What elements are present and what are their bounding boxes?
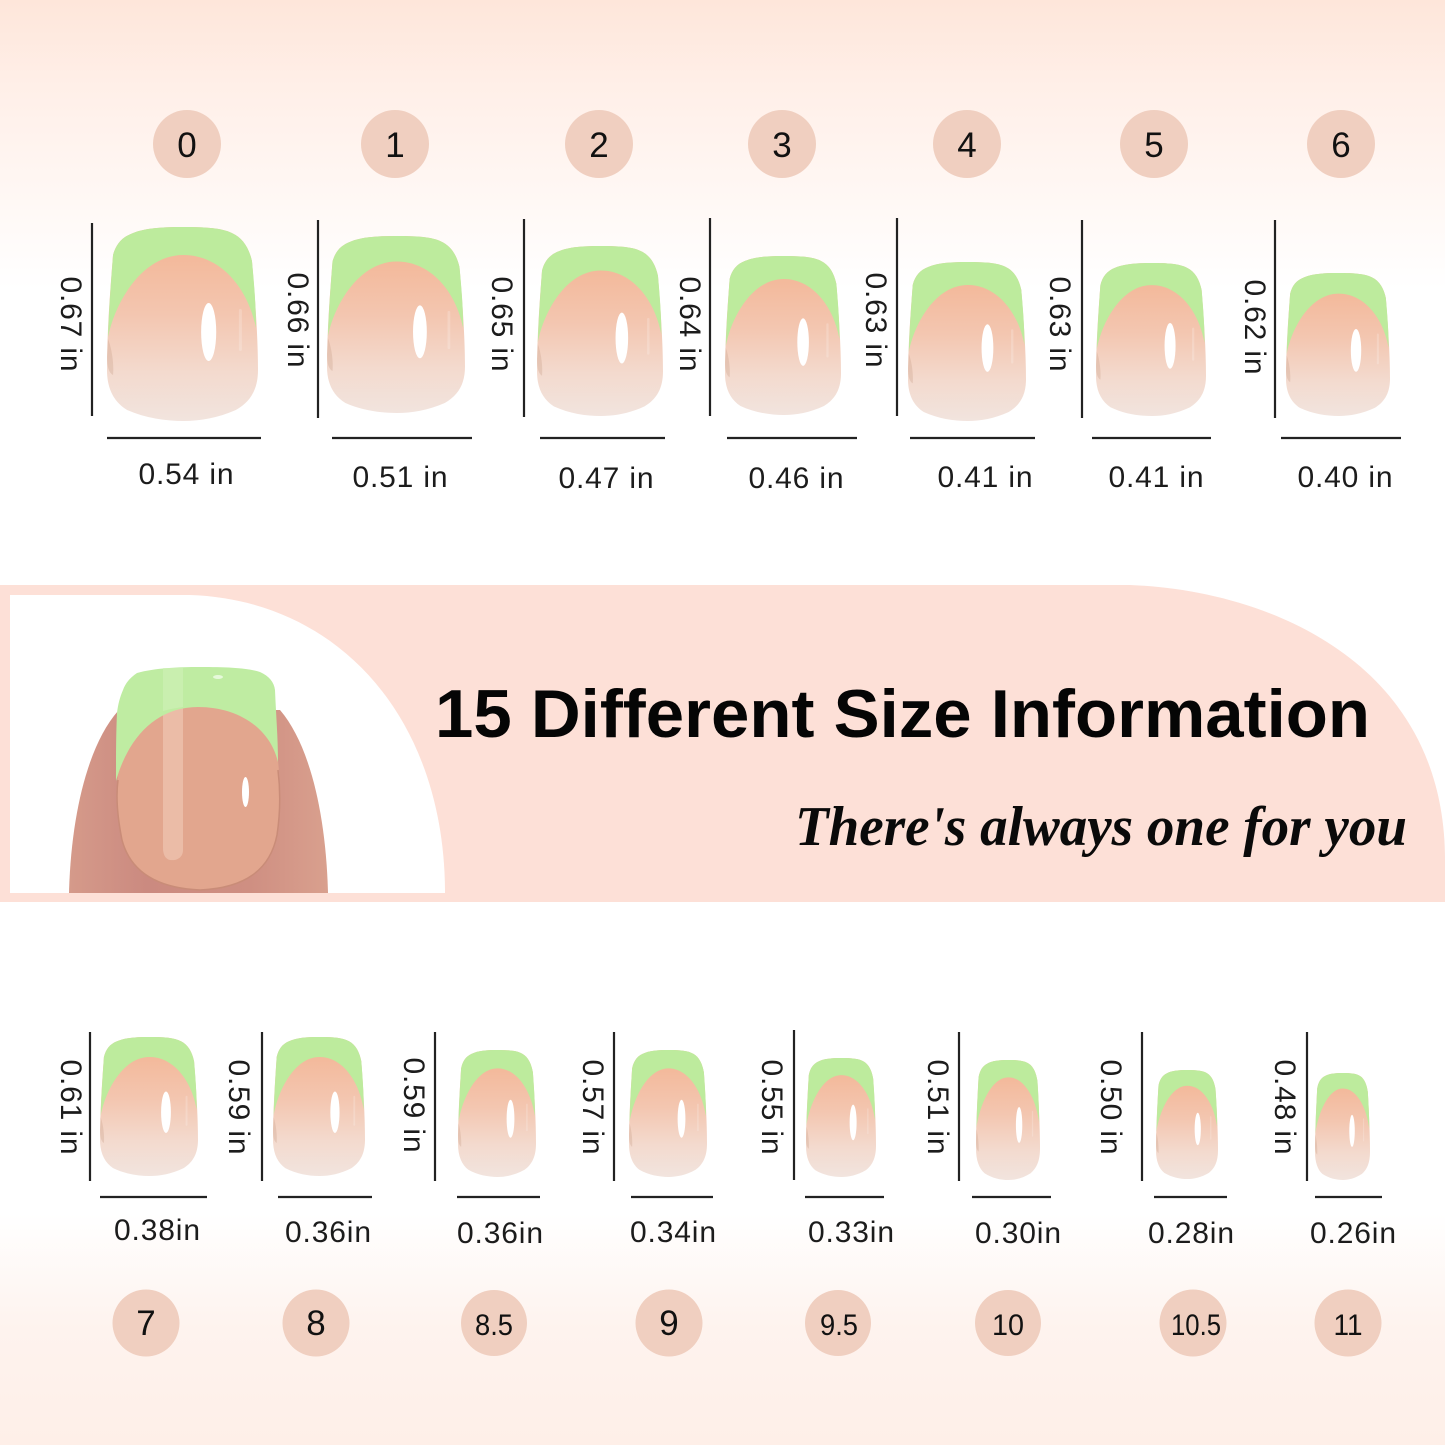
panel: banner xyxy=(0,585,1445,902)
number 9: 9 xyxy=(659,1304,679,1343)
width line xyxy=(1154,1196,1227,1198)
nail 8.5 xyxy=(458,1050,536,1177)
height line xyxy=(89,1032,91,1181)
height line xyxy=(709,218,711,416)
width label: 0.54 in xyxy=(138,458,234,491)
subtitle: There's always one for you xyxy=(795,796,1407,858)
nail 6 xyxy=(1286,273,1390,416)
number 6: 6 xyxy=(1331,126,1351,165)
nail 3 xyxy=(725,256,841,415)
height line xyxy=(1274,220,1276,418)
width line xyxy=(457,1196,540,1198)
size 5 xyxy=(1043,110,1211,494)
height label: 0.62 in xyxy=(1238,280,1271,374)
badge 10 xyxy=(975,1290,1041,1356)
number 4: 4 xyxy=(957,126,977,165)
width line xyxy=(805,1196,884,1198)
height label: 0.63 in xyxy=(1043,276,1076,372)
banner shape xyxy=(0,585,1445,902)
size 7 xyxy=(54,1032,207,1356)
number 10.5: 10.5 xyxy=(1171,1309,1221,1342)
number 1: 1 xyxy=(385,126,405,165)
height label: 0.66 in xyxy=(281,272,314,368)
number 2: 2 xyxy=(589,126,609,165)
badge 7 xyxy=(112,1290,180,1356)
height label: 0.59 in xyxy=(397,1058,430,1152)
width label: 0.46 in xyxy=(748,462,844,495)
badge 3 xyxy=(748,110,816,178)
number 9.5: 9.5 xyxy=(820,1309,858,1342)
nail 9 xyxy=(629,1050,707,1177)
width label: 0.28in xyxy=(1148,1217,1234,1250)
width line xyxy=(278,1196,372,1198)
badge 11 xyxy=(1314,1290,1382,1356)
size 1 xyxy=(281,110,472,494)
height line xyxy=(1141,1032,1143,1181)
number 10: 10 xyxy=(992,1309,1024,1342)
badge 8 xyxy=(282,1290,350,1356)
height label: 0.51 in xyxy=(921,1060,954,1154)
badge 9.5 xyxy=(805,1290,871,1356)
width line xyxy=(107,437,261,439)
width label: 0.36in xyxy=(285,1216,371,1249)
height label: 0.65 in xyxy=(485,276,518,372)
size 9 xyxy=(576,1032,716,1356)
nail 11 xyxy=(1315,1073,1370,1180)
height line xyxy=(1306,1032,1308,1181)
width label: 0.41 in xyxy=(938,461,1032,494)
height line xyxy=(317,220,319,418)
size 4 xyxy=(859,110,1035,494)
size 2 xyxy=(485,110,665,495)
width line xyxy=(631,1196,713,1198)
height label: 0.63 in xyxy=(859,272,892,368)
nail 7 xyxy=(100,1037,198,1176)
nail 8 xyxy=(273,1037,365,1176)
height label: 0.48 in xyxy=(1268,1060,1301,1154)
width label: 0.51 in xyxy=(352,461,448,494)
size 3 xyxy=(673,110,857,495)
width line xyxy=(1281,437,1401,439)
height line xyxy=(261,1032,263,1181)
width line xyxy=(910,437,1035,439)
width line xyxy=(972,1196,1051,1198)
width label: 0.34in xyxy=(630,1216,716,1249)
badge 4 xyxy=(933,110,1001,178)
width line xyxy=(100,1196,207,1198)
height label: 0.67 in xyxy=(54,276,87,372)
badge 1 xyxy=(361,110,429,178)
height line xyxy=(434,1032,436,1181)
white image panel xyxy=(10,595,445,893)
badge 0 xyxy=(153,110,221,178)
width label: 0.40 in xyxy=(1298,461,1392,494)
nail 2 xyxy=(537,246,663,416)
size 8 xyxy=(222,1032,372,1356)
nail 1 xyxy=(327,236,465,413)
height label: 0.59 in xyxy=(222,1060,255,1154)
nail 4 xyxy=(908,262,1026,421)
nail 10 xyxy=(976,1060,1040,1180)
height line xyxy=(793,1030,795,1180)
size 10 xyxy=(921,1032,1061,1356)
nail 9.5 xyxy=(806,1058,876,1177)
nail 5 xyxy=(1096,263,1206,416)
height line xyxy=(896,218,898,416)
badge 9 xyxy=(636,1290,702,1356)
height line xyxy=(1081,220,1083,418)
height line xyxy=(523,219,525,417)
width line xyxy=(540,437,665,439)
number 11: 11 xyxy=(1334,1309,1362,1342)
size 6 xyxy=(1238,110,1401,494)
height label: 0.61 in xyxy=(54,1060,87,1154)
number 5: 5 xyxy=(1144,126,1164,165)
width line xyxy=(727,437,857,439)
width line xyxy=(1315,1196,1382,1198)
nail 0 xyxy=(107,227,258,421)
width label: 0.33in xyxy=(808,1216,894,1249)
height label: 0.55 in xyxy=(755,1060,788,1154)
size 0 xyxy=(54,110,261,491)
number 8.5: 8.5 xyxy=(475,1309,513,1342)
size 10.5 xyxy=(1094,1032,1234,1356)
badge 10.5 xyxy=(1160,1290,1226,1356)
size 11 xyxy=(1268,1032,1396,1356)
width label: 0.30in xyxy=(975,1217,1061,1250)
width label: 0.47 in xyxy=(558,462,654,495)
badge 5 xyxy=(1120,110,1188,178)
height label: 0.50 in xyxy=(1094,1060,1127,1154)
badge 2 xyxy=(565,110,633,178)
title: 15 Different Size Information xyxy=(435,676,1370,752)
height line xyxy=(613,1032,615,1181)
width label: 0.26in xyxy=(1310,1217,1396,1250)
image: finger with green french tip nail xyxy=(69,667,328,893)
number 0: 0 xyxy=(177,126,197,165)
number 7: 7 xyxy=(136,1304,156,1343)
height label: 0.64 in xyxy=(673,276,706,372)
size 8.5 xyxy=(397,1032,543,1356)
badge 6 xyxy=(1307,110,1375,178)
width line xyxy=(332,437,472,439)
width line xyxy=(1092,437,1211,439)
nail 10.5 xyxy=(1156,1070,1218,1179)
width label: 0.38in xyxy=(114,1214,200,1247)
number 8: 8 xyxy=(306,1304,326,1343)
badge 8.5 xyxy=(461,1290,527,1356)
width label: 0.41 in xyxy=(1108,461,1204,494)
height label: 0.57 in xyxy=(576,1060,609,1154)
number 3: 3 xyxy=(772,126,792,165)
height line xyxy=(91,223,93,416)
height line xyxy=(958,1032,960,1181)
size 9.5 xyxy=(755,1030,894,1356)
width label: 0.36in xyxy=(457,1217,543,1250)
